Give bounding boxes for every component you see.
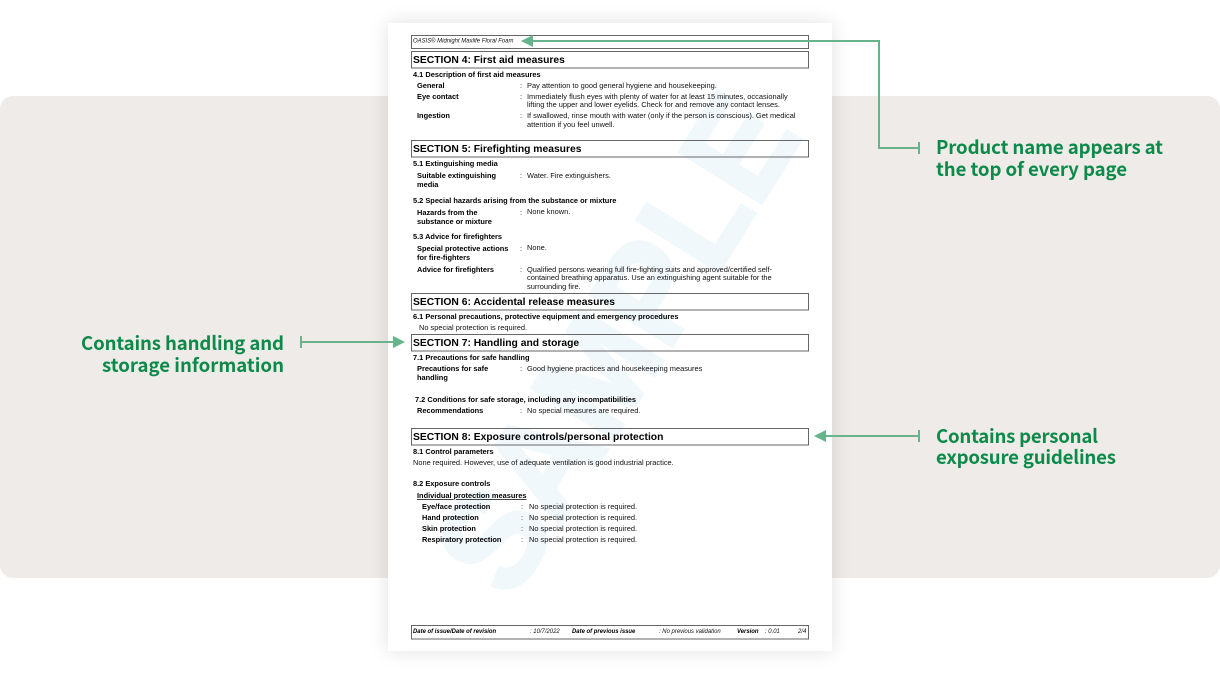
section 4: first aid measures: SECTION 4: First aid measures (413, 55, 565, 66)
arrow: product name (521, 35, 919, 154)
section 8: exposure controls: : (521, 502, 523, 511)
callout: handling and storage: Contains handling and (81, 329, 284, 356)
section 5: firefighting measures: Hazards from the (417, 208, 478, 217)
section 5: firefighting measures: None known. (527, 207, 570, 216)
watermark: SAMPLE: SAMPLE (404, 68, 829, 618)
section 7: handling and storage: 7.1 Precautions for safe handling (413, 353, 530, 362)
section 6: accidental release measures (412, 294, 808, 332)
section 8: exposure controls (412, 428, 808, 544)
section 4: first aid measures: Immediately flush eyes with plenty of water for at least 15 minutes, occasionally (527, 92, 788, 101)
section 5: firefighting measures: Qualified persons wearing full fire-fighting suits and approved/certified self- (527, 265, 773, 274)
section 5: firefighting measures: : (520, 244, 522, 253)
section 4: first aid measures: : (520, 92, 522, 101)
section 8: exposure controls: No special protection is required. (529, 535, 637, 544)
section 5: firefighting measures: : (520, 171, 522, 180)
section 8: exposure controls: : (521, 524, 523, 533)
section 8: exposure controls: Individual protection measures (417, 491, 526, 500)
panel: document page (388, 23, 832, 651)
section 8: exposure controls: : (521, 535, 523, 544)
section 4: first aid measures: Ingestion (417, 111, 450, 120)
section 5: firefighting measures: substance or mixture (417, 217, 492, 226)
section 7: handling and storage: : (520, 406, 522, 415)
section 5: firefighting measures: Advice for firefighters (417, 265, 494, 274)
callout: handling and storage (81, 329, 284, 378)
section 7: handling and storage: Recommendations (417, 406, 483, 415)
section 8: exposure controls: No special protection is required. (529, 502, 637, 511)
section 6: accidental release measures: 6.1 Personal precautions, protective equipment and emergency procedures (413, 312, 678, 321)
footer: revision info: : 10/7/2022 (530, 629, 560, 635)
callout: personal exposure (936, 422, 1116, 470)
header: product name box: OASIS® Midnight Maxlife Floral Foam (413, 38, 513, 44)
section 5: firefighting measures: for fire-fighters (417, 253, 470, 262)
section 7: handling and storage: : (520, 364, 522, 373)
arrow: personal exposure (814, 430, 919, 442)
section 5: firefighting measures: : (520, 208, 522, 217)
section 8: exposure controls: 8.2 Exposure controls (413, 479, 490, 488)
footer: revision info: : 0.01 (765, 629, 780, 635)
section 4: first aid measures: : (520, 81, 522, 90)
callout: handling and storage: storage information (102, 351, 284, 378)
section 8: exposure controls: : (521, 513, 523, 522)
callout: personal exposure: Contains personal (936, 422, 1098, 449)
arrow: handling and storage (301, 336, 405, 348)
footer: revision info: Date of issue/Date of revision (413, 629, 497, 635)
section 8: exposure controls: Hand protection (422, 513, 479, 522)
section 4: first aid measures: General (417, 81, 445, 90)
section 4: first aid measures: : (520, 111, 522, 120)
section 5: firefighting measures (412, 140, 808, 291)
section 7: handling and storage: SECTION 7: Handling and storage (413, 338, 579, 349)
section 5: firefighting measures: 5.3 Advice for firefighters (413, 232, 502, 241)
section 5: firefighting measures: media (417, 180, 439, 189)
section 5: firefighting measures: Special protective actions (417, 244, 508, 253)
section 7: handling and storage: Good hygiene practices and housekeeping measures (527, 364, 703, 373)
footer: revision info: Version (737, 629, 759, 635)
section 7: handling and storage: handling (417, 373, 448, 382)
panel: beige background (0, 96, 1220, 578)
section 5: firefighting measures: SECTION 5: Firefighting measures (413, 144, 582, 155)
section 8: exposure controls: Skin protection (422, 524, 476, 533)
header: product name box (412, 36, 808, 48)
footer: revision info: Date of previous issue (572, 629, 636, 635)
section 4: first aid measures: If swallowed, rinse mouth with water (only if the person is conscious). Get medical (527, 111, 796, 120)
section 4: first aid measures: Eye contact (417, 92, 459, 101)
section 7: handling and storage: Precautions for safe (417, 364, 488, 373)
footer: revision info: 2/4 (797, 629, 807, 635)
callout: product name: Product name appears at (936, 133, 1163, 160)
section 4: first aid measures: attention if you feel unwell. (527, 120, 614, 129)
section 7: handling and storage (412, 334, 808, 415)
section 8: exposure controls: None required. However, use of adequate ventilation is good industrial practice. (413, 458, 674, 467)
section 5: firefighting measures: Water. Fire extinguishers. (527, 171, 611, 180)
section 5: firefighting measures: surrounding fire. (527, 282, 581, 291)
callout: product name: the top of every page (936, 155, 1127, 182)
section 8: exposure controls: Respiratory protection (422, 535, 502, 544)
callout: product name (936, 133, 1163, 182)
section 6: accidental release measures: No special protection is required. (419, 323, 527, 332)
section 5: firefighting measures: 5.1 Extinguishing media (413, 159, 499, 168)
footer: revision info (412, 626, 808, 639)
section 4: first aid measures: 4.1 Description of first aid measures (413, 70, 541, 79)
section 7: handling and storage: 7.2 Conditions for safe storage, including any incompatibilities (415, 395, 636, 404)
section 5: firefighting measures: 5.2 Special hazards arising from the substance or mixture (413, 196, 616, 205)
section 5: firefighting measures: None. (527, 243, 547, 252)
section 8: exposure controls: SECTION 8: Exposure controls/personal protection (413, 432, 663, 443)
section 8: exposure controls: No special protection is required. (529, 524, 637, 533)
section 5: firefighting measures: contained breathing apparatus. Use an extinguishing agent suitable for the (527, 273, 772, 282)
footer: revision info: : No previous validation (659, 629, 721, 635)
section 4: first aid measures (412, 52, 808, 129)
callout: personal exposure: exposure guidelines (936, 443, 1116, 470)
section 4: first aid measures: Pay attention to good general hygiene and housekeeping. (527, 81, 717, 90)
section 8: exposure controls: No special protection is required. (529, 513, 637, 522)
section 7: handling and storage: No special measures are required. (527, 406, 640, 415)
section 5: firefighting measures: Suitable extinguishing (417, 171, 496, 180)
section 8: exposure controls: Eye/face protection (422, 502, 491, 511)
section 6: accidental release measures: SECTION 6: Accidental release measures (413, 297, 615, 308)
section 5: firefighting measures: : (520, 265, 522, 274)
section 4: first aid measures: lifting the upper and lower eyelids. Check for and remove any contact lenses. (527, 100, 780, 109)
section 8: exposure controls: 8.1 Control parameters (413, 447, 494, 456)
